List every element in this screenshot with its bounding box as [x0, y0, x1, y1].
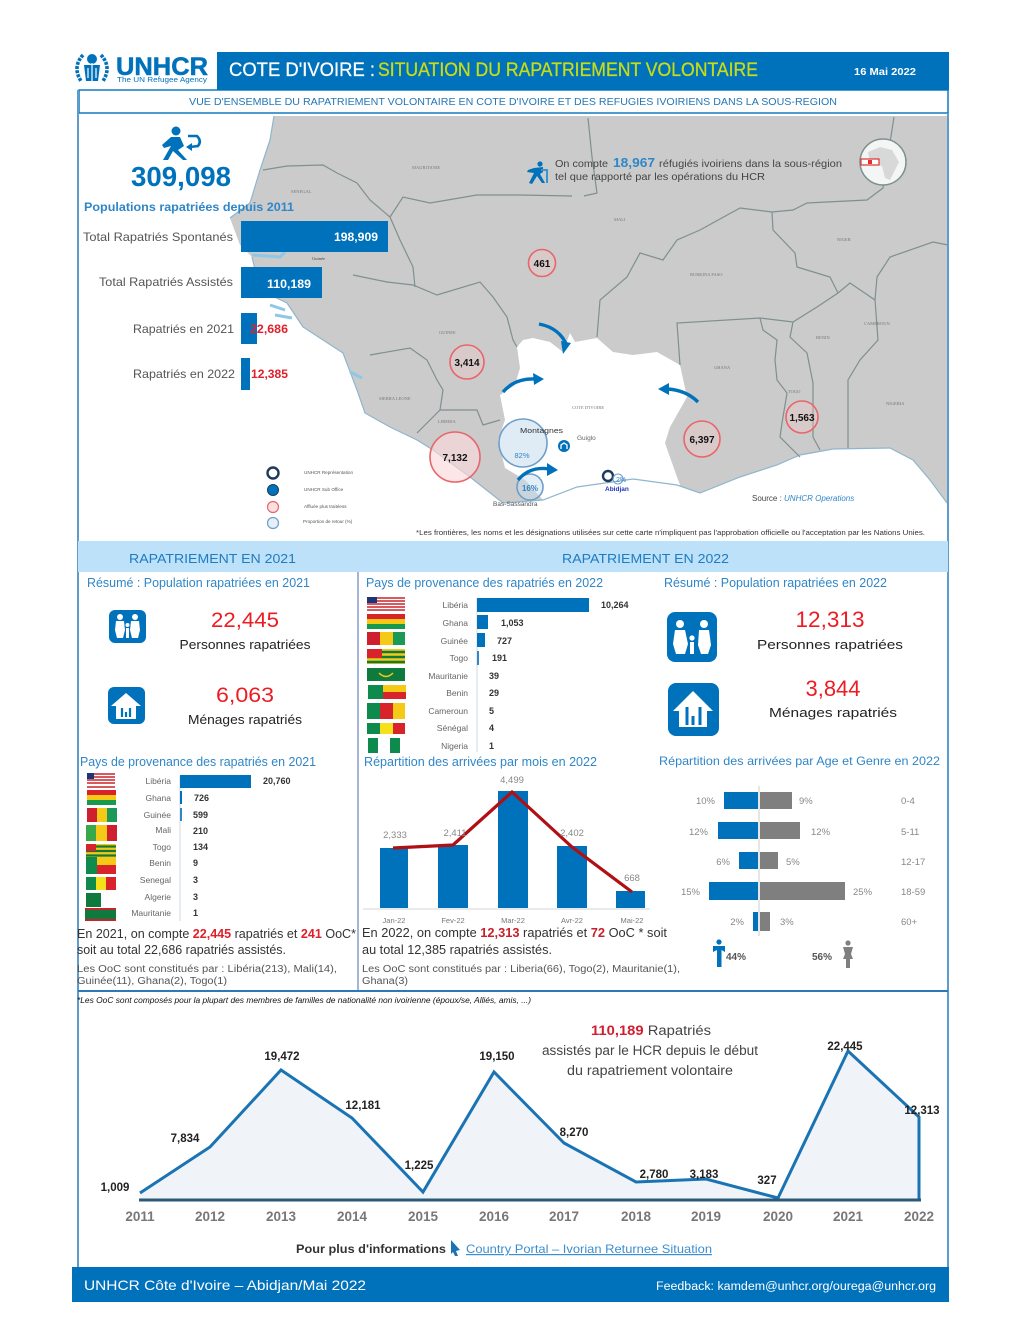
population pyramid: age and gender 2022: 6%	[716, 857, 731, 868]
bar chart: origin countries 2021: Libéria	[145, 776, 171, 786]
bar chart: origin countries 2021	[80, 755, 316, 921]
panel: summary 2021: Ménages rapatriés	[188, 713, 302, 727]
logo: UNHCR: The UN Refugee Agency	[117, 75, 207, 84]
combo chart: arrivals by month 2022: Jan-22	[383, 916, 405, 925]
bar chart: origin countries 2022: 5	[489, 706, 494, 716]
callout: assisted total: assistés par le HCR depuis le début	[542, 1043, 758, 1058]
population pyramid: age and gender 2022: 5%	[786, 857, 800, 868]
population pyramid: age and gender 2022: 60+	[901, 917, 918, 928]
callout: refugees in sub-region: réfugiés ivoiriens dans la sous-région	[659, 158, 842, 170]
population pyramid: age and gender 2022: 18-59	[901, 887, 925, 898]
section band: 2021 and 2022 headings	[78, 541, 948, 572]
subtitle strip: VUE D'ENSEMBLE DU RAPATRIEMENT VOLONTAIRE EN COTE D'IVOIRE ET DES REFUGIES IVOIRIENS DANS LA SOUS-REGION	[189, 97, 837, 108]
combo chart: arrivals by month 2022: 2,333	[383, 830, 407, 841]
combo chart: arrivals by month 2022: Répartition des arrivées par mois en 2022	[364, 755, 597, 769]
combo chart: arrivals by month 2022: 668	[624, 873, 640, 884]
bar chart: origin countries 2021: Senegal	[140, 875, 171, 885]
bar chart: origin countries 2021: 3	[193, 875, 198, 885]
bar chart: origin countries 2021: 134	[193, 842, 208, 852]
bar chart: origin countries 2021: 599	[193, 810, 208, 820]
bar chart: origin countries 2021: Pays de provenance des rapatriés en 2021	[80, 755, 316, 769]
map markers: returnee counts: Bas-Sassandra	[493, 501, 538, 508]
header banner: 16 Mai 2022	[854, 66, 916, 78]
callout: refugees in sub-region: 18,967	[613, 155, 655, 170]
population pyramid: age and gender 2022: 15%	[681, 887, 701, 898]
bar chart: origin countries 2022: Togo	[450, 653, 468, 663]
area chart: assisted returnees by year: 2013	[266, 1209, 297, 1224]
bar chart: origin countries 2022: Mauritanie	[428, 671, 468, 681]
bar chart: returnee totals: Rapatriés en 2021	[133, 322, 234, 336]
callout: refugees in sub-region: On compte	[555, 158, 608, 170]
combo chart: arrivals by month 2022	[363, 755, 650, 925]
footnote: OoC definition: *Les OoC sont composés pour la plupart des membres de familles de nationalité non ivoirienne (époux/se, Alliés, amis, ...)	[77, 996, 531, 1005]
area chart: assisted returnees by year: 12,181	[345, 1100, 381, 1112]
map: West Africa base map: GHANA	[714, 365, 731, 370]
population pyramid: age and gender 2022: 25%	[853, 887, 873, 898]
bar chart: origin countries 2022: 191	[492, 653, 507, 663]
marker: Guiglo office: Guiglo	[577, 435, 596, 442]
map: West Africa base map: NIGER	[837, 237, 851, 242]
bar chart: origin countries 2021: Guinée	[144, 810, 171, 820]
combo chart: arrivals by month 2022: Mai-22	[621, 916, 643, 925]
bar chart: origin countries 2022: 4	[489, 723, 494, 733]
area chart: assisted returnees by year: 2011	[125, 1209, 155, 1224]
area chart: assisted returnees by year: 2016	[479, 1209, 510, 1224]
area chart: assisted returnees by year: 7,834	[171, 1133, 200, 1145]
bar chart: origin countries 2022	[366, 576, 629, 753]
combo chart: arrivals by month 2022: 2,402	[560, 828, 584, 839]
link: more information	[296, 1240, 712, 1256]
legend: map symbols: UNHCR Représentation	[304, 470, 353, 475]
combo chart: arrivals by month 2022: Mar-22	[501, 916, 525, 925]
frame lines	[78, 90, 948, 1268]
bar chart: origin countries 2021: Mauritanie	[131, 908, 171, 918]
marker: Abidjan representation: Abidjan	[605, 486, 629, 493]
bar chart: origin countries 2022: Nigeria	[441, 741, 468, 751]
callout: refugees in sub-region: tel que rapporté par les opérations du HCR	[555, 171, 765, 183]
icon: fleeing people	[527, 161, 547, 184]
text block: 2021 OoC note: Guinée(11), Ghana(2), Togo(1)	[77, 976, 227, 987]
combo chart: arrivals by month 2022: Avr-22	[561, 916, 583, 925]
text block: 2022 OoC note: Ghana(3)	[362, 976, 408, 987]
area chart: assisted returnees by year: 1,225	[405, 1160, 434, 1172]
map: West Africa base map: COTE D'IVOIRE	[572, 405, 604, 410]
bar chart: origin countries 2022: Guinée	[441, 636, 468, 646]
bar chart: origin countries 2021: 20,760	[263, 776, 291, 786]
header banner: SITUATION DU RAPATRIEMENT VOLONTAIRE	[378, 60, 758, 81]
bar chart: origin countries 2021: 1	[193, 908, 198, 918]
callout: assisted total	[542, 1023, 758, 1078]
icon: cursor	[451, 1240, 460, 1256]
icon: walking person with return arrow	[162, 126, 200, 160]
area chart: assisted returnees by year: 2022	[904, 1209, 934, 1224]
text block: 2022 OoC note	[362, 926, 680, 987]
bar chart: origin countries 2022: 29	[489, 688, 499, 698]
icon: female with share	[812, 940, 853, 968]
inset: Africa locator globe	[860, 139, 906, 185]
marker: Togo 1,563	[786, 401, 818, 433]
population pyramid: age and gender 2022: 12%	[689, 827, 709, 838]
panel: summary 2022: 12,313	[796, 607, 864, 632]
area chart: assisted returnees by year	[101, 1041, 940, 1224]
population pyramid: age and gender 2022	[659, 754, 940, 968]
panel: summary 2022: Personnes rapatriées	[757, 637, 904, 652]
map: West Africa base map: NIGERIA	[886, 401, 905, 406]
footer bar: UNHCR Côte d'Ivoire – Abidjan/Mai 2022	[84, 1277, 366, 1293]
area chart: assisted returnees by year: 2019	[691, 1209, 721, 1224]
text block: 2021 OoC note: En 2021, on compte 22,445 rapatriés et 241 OoC*	[77, 927, 356, 941]
area chart: assisted returnees by year: 2018	[621, 1209, 652, 1224]
bar chart: origin countries 2021: 3	[193, 892, 198, 902]
area chart: assisted returnees by year: 2021	[833, 1209, 864, 1224]
bar chart: origin countries 2021: 9	[193, 858, 198, 868]
bar chart: origin countries 2021: Mali	[155, 825, 171, 835]
panel: summary 2022: Ménages rapatriés	[769, 705, 898, 720]
bar chart: origin countries 2021: Algerie	[145, 892, 171, 902]
area chart: assisted returnees by year: 19,472	[264, 1051, 300, 1063]
area chart: assisted returnees by year: 19,150	[479, 1051, 515, 1063]
bar chart: origin countries 2021: 726	[194, 793, 209, 803]
icon: female with share: 56%	[812, 952, 832, 963]
population pyramid: age and gender 2022: Répartition des arrivées par Age et Genre en 2022	[659, 754, 940, 768]
icon: household	[668, 683, 719, 736]
marker: Montagnes 82%	[499, 419, 563, 467]
combo chart: arrivals by month 2022: 2,411	[443, 828, 467, 839]
bar chart: returnee totals: Total Rapatriés Assistés	[99, 275, 233, 289]
panel: total returnees: Populations rapatriées depuis 2011	[84, 200, 294, 214]
map disclaimer: *Les frontières, les noms et les désignations utilisées sur cette carte n'impliquent pas l'approbation officielle ou l'acceptation par les Nations Unies.	[416, 530, 925, 537]
area chart: assisted returnees by year: 2017	[549, 1209, 579, 1224]
link: more information: Pour plus d'informations	[296, 1242, 446, 1256]
marker: Abidjan representation: 2%	[616, 477, 626, 484]
population pyramid: age and gender 2022: 0-4	[901, 796, 915, 807]
bar chart: origin countries 2022: Pays de provenance des rapatriés en 2022	[366, 576, 603, 590]
area chart: assisted returnees by year: 2015	[408, 1209, 439, 1224]
callout: assisted total: 110,189 Rapatriés	[591, 1023, 711, 1038]
text block: 2022 OoC note: En 2022, on compte 12,313 rapatriés et 72 OoC * soit	[362, 926, 668, 940]
bar chart: origin countries 2022: 1,053	[501, 618, 524, 628]
bar chart: origin countries 2022: 10,264	[601, 600, 629, 610]
flags: 2022 countries	[367, 597, 406, 753]
section band: 2021 and 2022 headings: RAPATRIEMENT EN 2021	[129, 551, 296, 566]
text block: 2022 OoC note: Les OoC sont constitués par : Liberia(66), Togo(2), Mauritanie(1),	[362, 964, 680, 975]
bar chart: returnee totals: 198,909	[334, 232, 378, 244]
icon: male with share: 44%	[726, 952, 746, 963]
panel: summary 2021: Résumé : Population rapatriées en 2021	[87, 576, 310, 590]
bar chart: origin countries 2022: Benin	[446, 688, 468, 698]
marker: Liberia 7,132	[430, 432, 480, 482]
marker: San Pedro 16%: 16%	[522, 484, 538, 493]
area chart: assisted returnees by year: 22,445	[827, 1041, 863, 1053]
map: West Africa base map: MAURITANIE	[412, 165, 440, 170]
map: West Africa base map: SENEGAL	[291, 189, 312, 194]
area chart: assisted returnees by year: 8,270	[560, 1127, 588, 1139]
marker: Abidjan representation	[603, 471, 629, 493]
panel: summary 2022: 3,844	[806, 676, 860, 701]
population pyramid: age and gender 2022: 10%	[696, 796, 716, 807]
bar chart: returnee totals: 22,686	[250, 324, 288, 336]
header banner: COTE D'IVOIRE :	[229, 60, 375, 81]
population pyramid: age and gender 2022: 5-11	[901, 827, 919, 838]
text block: 2021 OoC note: Les OoC sont constitués par : Libéria(213), Mali(14),	[77, 964, 337, 975]
marker: Guiglo office	[558, 435, 596, 452]
marker: Montagnes 82%: 82%	[514, 451, 530, 460]
map: West Africa base map: MALI	[614, 217, 626, 222]
footer bar: Feedback: kamdem@unhcr.org/ourega@unhcr.org	[656, 1281, 936, 1293]
population pyramid: age and gender 2022: 2%	[730, 917, 745, 928]
panel: summary 2022: Résumé : Population rapatriées en 2022	[664, 576, 887, 590]
icon: male with share	[713, 939, 746, 967]
panel: summary 2021	[87, 576, 310, 727]
map: West Africa base map: BENIN	[816, 335, 830, 340]
link: more information: Country Portal – Ivorian Returnee Situation	[466, 1242, 712, 1256]
map: West Africa base map: SIERRA LEONE	[379, 396, 411, 401]
bar chart: origin countries 2021: Togo	[153, 842, 171, 852]
area chart: assisted returnees by year: 12,313	[904, 1105, 940, 1117]
marker: Guinea 3,414: 3,414	[454, 358, 480, 369]
population pyramid: age and gender 2022: 12-17	[901, 857, 925, 868]
bar chart: returnee totals: 12,385	[251, 369, 289, 381]
marker: Mali 461: 461	[534, 259, 551, 270]
area chart: assisted returnees by year: 3,183	[690, 1169, 718, 1181]
panel: summary 2022	[664, 576, 904, 736]
map: West Africa base map: GUINEE	[439, 330, 456, 335]
map: West Africa base map: BURKINA FASO	[690, 272, 723, 277]
callout: assisted total: du rapatriement volontaire	[567, 1063, 733, 1078]
icon: family	[109, 610, 146, 643]
population pyramid: age and gender 2022: 9%	[799, 796, 813, 807]
area chart: assisted returnees by year: 1,009	[101, 1182, 129, 1194]
bar chart: returnee totals: Rapatriés en 2022	[133, 367, 235, 381]
bar chart: origin countries 2022: 39	[489, 671, 499, 681]
panel: total returnees	[84, 126, 294, 214]
flags: 2021 countries	[85, 773, 117, 921]
bar chart: origin countries 2022: Cameroun	[428, 706, 468, 716]
text block: 2022 OoC note: au total 12,385 rapatriés assistés.	[362, 943, 552, 957]
bar chart: returnee totals: Total Rapatriés Spontanés	[83, 230, 233, 244]
bar chart: origin countries 2021: Benin	[149, 858, 171, 868]
marker: Guinea 3,414	[450, 345, 484, 379]
area chart: assisted returnees by year: 327	[757, 1175, 777, 1187]
logo: UNHCR: UNHCR	[116, 53, 208, 81]
panel: summary 2021: 6,063	[216, 684, 274, 707]
bar chart: origin countries 2021: 210	[193, 826, 208, 836]
map: West Africa base map: CAMEROUN	[864, 321, 891, 326]
map: West Africa base map: LIBERIA	[438, 419, 456, 424]
marker: Montagnes 82%: Montagnes	[520, 426, 563, 435]
combo chart: arrivals by month 2022: Fev-22	[441, 916, 465, 925]
map: West Africa base map: TOGO	[788, 389, 801, 394]
marker: Ghana 6,397	[684, 421, 720, 457]
area chart: assisted returnees by year: 2,780	[640, 1169, 668, 1181]
map markers: returnee counts	[430, 250, 818, 508]
map: West Africa base map: Guinée	[312, 256, 325, 261]
area chart: assisted returnees by year: 2012	[195, 1209, 225, 1224]
combo chart: arrivals by month 2022: 4,499	[500, 775, 524, 786]
logo: UNHCR	[77, 53, 208, 84]
text block: 2021 OoC note: soit au total 22,686 rapatriés assistés.	[77, 943, 286, 957]
text block: 2021 OoC note	[77, 927, 356, 987]
icon: household	[108, 687, 145, 724]
bar chart: origin countries 2022: Libéria	[442, 600, 468, 610]
source note: Source : UNHCR Operations	[752, 494, 854, 503]
legend: map symbols	[268, 468, 353, 528]
panel: summary 2021: Personnes rapatriées	[180, 638, 310, 652]
marker: Togo 1,563: 1,563	[789, 413, 815, 424]
header banner	[217, 52, 949, 90]
bar chart: origin countries 2022: Ghana	[442, 618, 468, 628]
panel: summary 2021: 22,445	[211, 609, 279, 632]
legend: map symbols: UNHCR Sub Office	[304, 487, 344, 492]
bar chart: origin countries 2022: Sénégal	[437, 723, 468, 733]
bar chart: origin countries 2021: Ghana	[145, 793, 171, 803]
marker: Liberia 7,132: 7,132	[442, 453, 468, 464]
icon: family	[667, 612, 717, 662]
bar chart: returnee totals: 110,189	[267, 279, 311, 291]
marker: Ghana 6,397: 6,397	[689, 435, 715, 446]
bar chart: returnee totals	[83, 221, 388, 390]
callout: refugees in sub-region	[527, 155, 842, 184]
footer bar	[72, 1267, 949, 1302]
marker: Mali 461	[528, 250, 556, 276]
marker: San Pedro 16%	[517, 474, 543, 500]
legend: map symbols: Affluée plus traitéess	[304, 504, 347, 509]
panel: total returnees: 309,098	[131, 161, 231, 192]
bar chart: origin countries 2022: 1	[489, 741, 494, 751]
section band: 2021 and 2022 headings: RAPATRIEMENT EN 2022	[562, 551, 729, 566]
arrows: return movements	[503, 324, 698, 480]
area chart: assisted returnees by year: 2014	[337, 1209, 368, 1224]
population pyramid: age and gender 2022: 3%	[780, 917, 794, 928]
legend: map symbols: Proportion de retour (%)	[303, 519, 353, 524]
population pyramid: age and gender 2022: 12%	[811, 827, 831, 838]
subtitle strip	[79, 90, 948, 113]
bar chart: origin countries 2022: 727	[497, 636, 512, 646]
map: West Africa base map	[230, 116, 948, 503]
area chart: assisted returnees by year: 2020	[763, 1209, 793, 1224]
